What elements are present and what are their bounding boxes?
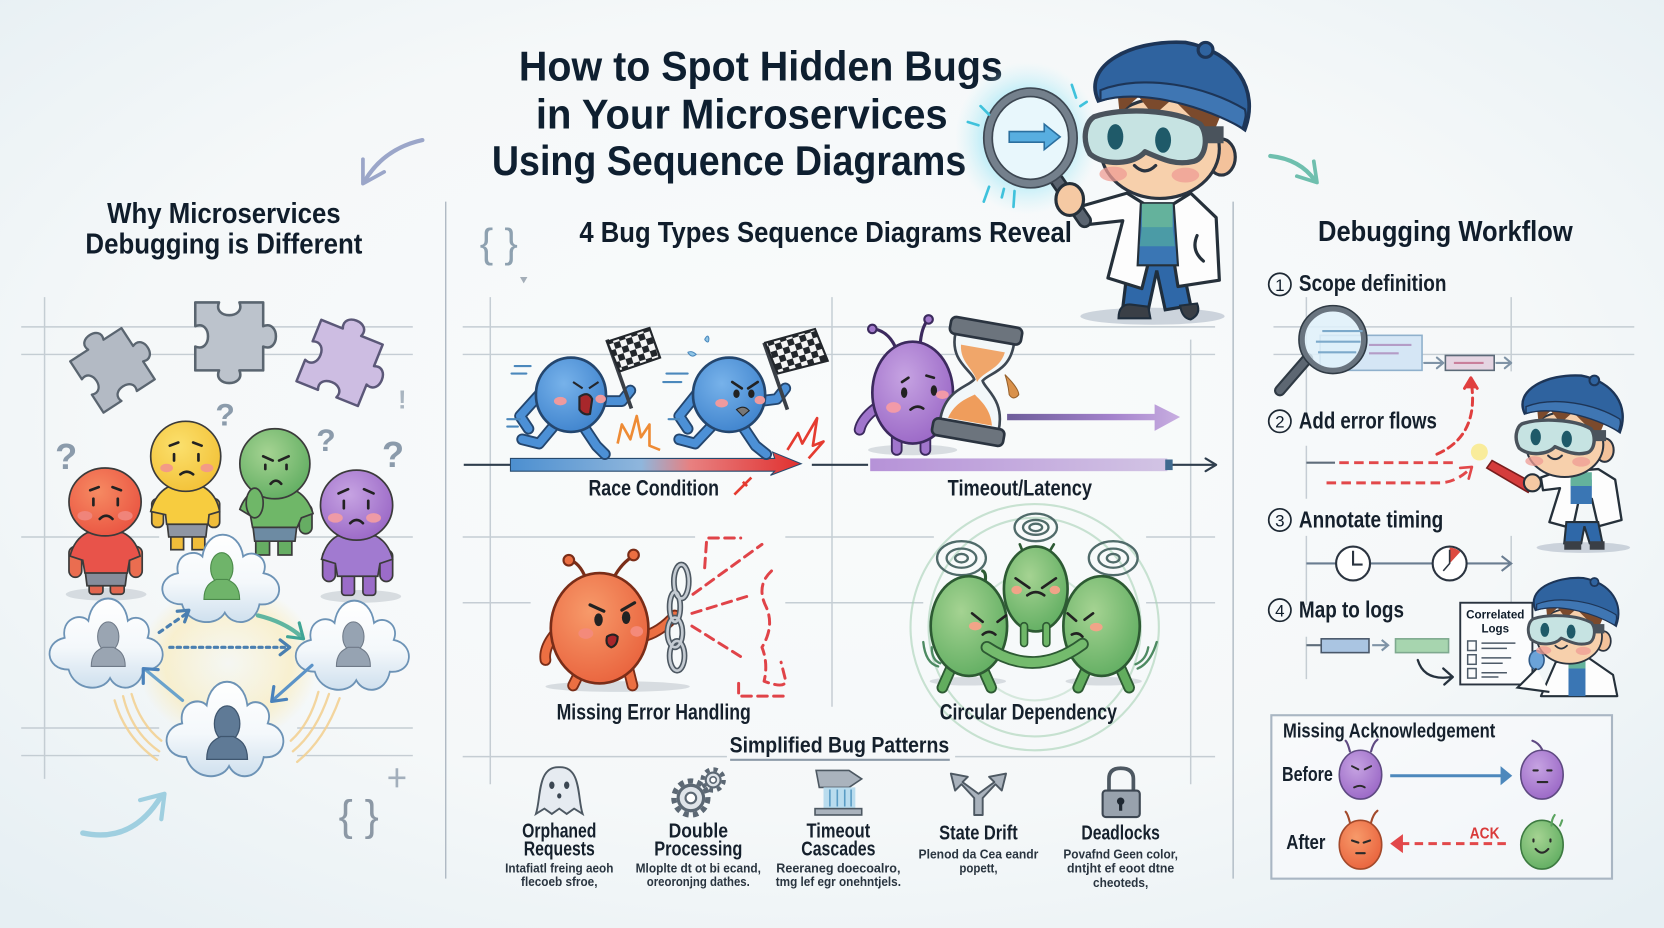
title: in Your Microservices bbox=[536, 91, 948, 137]
purple bug bbox=[860, 315, 957, 455]
pattern: deadlocks: dntjht ef eoot dtne bbox=[1067, 860, 1174, 875]
pattern: state drift: Plenod da Cea eandr bbox=[918, 846, 1038, 861]
hourglass bbox=[931, 316, 1023, 447]
left green bug bbox=[930, 571, 1007, 688]
collision sparks bbox=[618, 416, 824, 495]
pattern: deadlocks: cheoteds, bbox=[1093, 875, 1148, 890]
icon: cascade bbox=[815, 770, 862, 815]
simplified bug patterns bbox=[505, 732, 1178, 890]
spirals bbox=[937, 514, 1138, 575]
step 1: scope definition bbox=[1269, 270, 1511, 391]
heading: 4 Bug Types Sequence Diagrams Reveal bbox=[579, 217, 1072, 249]
blue runner two bbox=[663, 336, 785, 454]
arrow: title to left panel bbox=[363, 140, 422, 184]
before row bbox=[1282, 740, 1563, 799]
heading: Debugging Workflow bbox=[1318, 216, 1573, 248]
scientist reading logs bbox=[1518, 578, 1618, 696]
step 4: map to logs: 4 bbox=[1275, 602, 1285, 621]
rings bbox=[911, 504, 1159, 750]
puzzle pieces bbox=[64, 302, 399, 413]
label: Race Condition bbox=[588, 476, 719, 501]
pattern: state drift: State Drift bbox=[939, 822, 1018, 844]
checkered flag one bbox=[607, 328, 660, 409]
confused characters bbox=[66, 421, 401, 603]
sequence grid lines bbox=[21, 297, 1634, 784]
overalls bbox=[1138, 204, 1178, 265]
callout: missing acknowledgement bbox=[1271, 715, 1612, 879]
label: Timeout/Latency bbox=[948, 476, 1092, 501]
step 3: annotate timing: Annotate timing bbox=[1299, 506, 1443, 532]
bug: timeout latency bbox=[812, 315, 1216, 501]
mini sequence boxes bbox=[1320, 335, 1422, 370]
pattern: state drift: popett, bbox=[959, 860, 998, 875]
step 1: scope definition: 1 bbox=[1275, 276, 1285, 295]
label: Missing Error Handling bbox=[557, 699, 751, 724]
pattern: deadlocks: Deadlocks bbox=[1081, 822, 1160, 844]
after row: ACK bbox=[1470, 825, 1500, 842]
race timeline bbox=[464, 464, 510, 466]
dashed error rays bbox=[692, 538, 785, 696]
panel: debugging workflow bbox=[1269, 216, 1630, 879]
motion marks bbox=[923, 642, 1157, 669]
code braces: { } bbox=[480, 220, 518, 266]
pattern: deadlocks bbox=[1063, 768, 1178, 890]
magnifier bbox=[1280, 306, 1367, 391]
pattern: timeout cascades: Reeraneg doecoalro, bbox=[776, 860, 900, 875]
pattern: double processing bbox=[636, 769, 761, 889]
small marker bbox=[520, 277, 527, 283]
pattern: orphaned requests: flecoeb sfroe, bbox=[521, 874, 597, 889]
blue runner one bbox=[507, 358, 630, 454]
callout: missing acknowledgement: Missing Acknowledgement bbox=[1283, 721, 1496, 743]
arrow: title to right panel bbox=[1270, 156, 1317, 183]
step 2: add error flows bbox=[1269, 375, 1630, 553]
pattern: orphaned requests: Intafiatl freing aeoh bbox=[505, 860, 613, 875]
ghost face bbox=[549, 782, 569, 799]
checkered flag two bbox=[764, 329, 828, 410]
glow bbox=[955, 62, 1099, 214]
yellow chaos ring bbox=[115, 584, 340, 762]
pattern: double processing: Double bbox=[669, 820, 728, 842]
pattern: timeout cascades: Cascades bbox=[801, 838, 876, 860]
column dividers bbox=[446, 202, 1233, 879]
yellow character bbox=[151, 421, 221, 550]
title: Using Sequence Diagrams bbox=[492, 138, 966, 184]
pattern: orphaned requests: Orphaned bbox=[522, 820, 596, 842]
top green bug bbox=[1004, 544, 1068, 643]
scientist with red pencil bbox=[1471, 375, 1630, 553]
pattern: timeout cascades: tmg lef egr onehntjels. bbox=[776, 874, 901, 889]
pattern: double processing: Processing bbox=[654, 838, 742, 860]
heading: Why Microservices bbox=[107, 198, 341, 230]
correlated logs card bbox=[1460, 603, 1532, 684]
step 4: map to logs bbox=[1269, 578, 1618, 696]
panel: four bug types bbox=[464, 217, 1216, 890]
pattern: deadlocks: Povafnd Geen color, bbox=[1063, 846, 1178, 861]
interlocked arms bbox=[987, 644, 1082, 662]
red character bbox=[69, 468, 142, 594]
label: Circular Dependency bbox=[940, 699, 1117, 724]
sparkle bbox=[388, 768, 405, 787]
icon: fork bbox=[951, 774, 1006, 815]
question marks: ? bbox=[316, 422, 336, 458]
latency timeline bbox=[812, 464, 1214, 466]
panel: why microservices debugging is different bbox=[50, 198, 409, 839]
icon: gears bbox=[674, 769, 724, 815]
red dashed path bbox=[1437, 378, 1477, 454]
icon: lock bbox=[1103, 768, 1140, 817]
heading: Simplified Bug Patterns bbox=[730, 732, 949, 757]
step 3: annotate timing: 3 bbox=[1275, 511, 1285, 530]
timing line bbox=[1306, 556, 1511, 571]
green character bbox=[240, 429, 313, 555]
before row: Before bbox=[1282, 764, 1333, 786]
broken chain bbox=[668, 565, 689, 671]
step 3: annotate timing bbox=[1269, 506, 1511, 580]
magnifier bbox=[1057, 180, 1085, 221]
delay arrow bbox=[1007, 404, 1180, 431]
bug: missing error handling bbox=[545, 538, 785, 724]
after row: After bbox=[1286, 832, 1326, 854]
step 2: add error flows: 2 bbox=[1275, 413, 1285, 432]
pattern: orphaned requests: Requests bbox=[524, 838, 595, 860]
title bbox=[492, 44, 1003, 184]
question marks bbox=[55, 387, 406, 477]
question marks: ? bbox=[215, 397, 235, 433]
purple character bbox=[320, 470, 393, 595]
question marks: ! bbox=[398, 387, 406, 415]
code braces: { } bbox=[339, 792, 379, 839]
pattern: timeout cascades: Timeout bbox=[807, 820, 870, 842]
clocks bbox=[1336, 547, 1467, 580]
decorative arrow bbox=[83, 794, 164, 835]
sparkles bbox=[968, 85, 1087, 207]
bug: circular dependency bbox=[911, 504, 1159, 750]
heading underline bbox=[730, 759, 950, 761]
icon: ghost bbox=[536, 767, 583, 814]
pattern: orphaned requests bbox=[505, 767, 613, 889]
service arrows bbox=[143, 610, 312, 701]
correlated logs card: Correlated bbox=[1466, 608, 1524, 622]
correlated logs card: Logs bbox=[1481, 621, 1509, 635]
after row bbox=[1286, 811, 1563, 869]
legs bbox=[1123, 255, 1191, 310]
main scientist with magnifier bbox=[955, 42, 1249, 325]
head bbox=[1085, 42, 1249, 198]
panel: why microservices debugging is different: Debugging is Different bbox=[85, 229, 363, 261]
step 1: scope definition: Scope definition bbox=[1299, 270, 1446, 296]
pattern: state drift bbox=[918, 774, 1038, 875]
pattern: timeout cascades bbox=[776, 770, 901, 889]
question marks: ? bbox=[55, 436, 77, 477]
coat bbox=[1082, 193, 1219, 289]
step 4: map to logs: Map to logs bbox=[1299, 597, 1404, 623]
log flow bbox=[1306, 644, 1321, 646]
question marks: ? bbox=[382, 434, 404, 475]
bug: race condition bbox=[464, 328, 828, 501]
pattern: double processing: Mloplte dt ot bi ecand, bbox=[636, 860, 761, 875]
orange bug bbox=[545, 550, 690, 692]
service clouds bbox=[50, 535, 409, 776]
error flow lines bbox=[1306, 462, 1335, 464]
sand drop bbox=[1005, 375, 1019, 398]
pattern: double processing: oreoronjng dathes. bbox=[647, 874, 750, 889]
right green bug bbox=[1063, 576, 1142, 688]
step 2: add error flows: Add error flows bbox=[1299, 408, 1437, 434]
title: How to Spot Hidden Bugs bbox=[519, 44, 1003, 90]
